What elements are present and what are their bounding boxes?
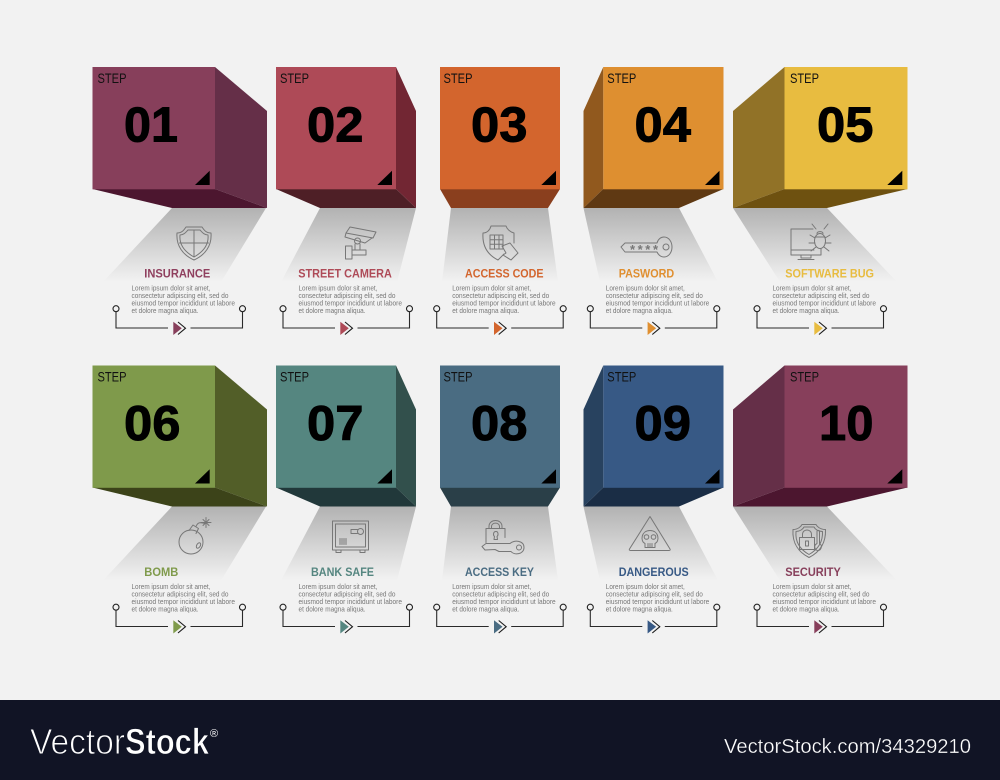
footer bar: ® <box>210 728 218 740</box>
panel: step 02 street camera <box>276 67 416 335</box>
heading: SOFTWARE BUG <box>785 267 874 281</box>
text block: et dolore magna aliqua. <box>606 604 673 614</box>
cube: STEP <box>280 370 309 384</box>
icon: safe <box>332 521 368 552</box>
shadow <box>733 208 897 282</box>
text block: eiusmod tempor incididunt ut labore <box>452 597 556 606</box>
connector arrow <box>280 306 412 335</box>
cube: 03 <box>471 98 528 153</box>
cube: 04 <box>634 98 691 153</box>
text block: Lorem ipsum dolor sit amet, <box>132 582 210 591</box>
heading: STREET CAMERA <box>298 267 392 281</box>
shadow <box>103 208 266 282</box>
text block: Lorem ipsum dolor sit amet, <box>298 582 378 591</box>
connector arrow <box>754 306 886 335</box>
text block: consectetur adipiscing elit, sed do <box>132 291 228 300</box>
text block: et dolore magna aliqua. <box>772 306 840 315</box>
cube: STEP <box>98 370 126 384</box>
connector arrow <box>434 604 566 634</box>
cube: STEP <box>444 370 472 384</box>
connector arrow <box>280 604 412 634</box>
cube: 10 <box>819 396 874 451</box>
text block: Lorem ipsum dolor sit amet, <box>132 284 210 292</box>
text block: eiusmod tempor incididunt ut labore <box>132 597 235 606</box>
icon: skull warning triangle <box>629 516 670 550</box>
cube: 06 <box>124 396 180 451</box>
text block: eiusmod tempor incididunt ut labore <box>452 298 556 308</box>
cube: STEP <box>280 71 309 86</box>
text block: eiusmod tempor incididunt ut labore <box>132 298 235 308</box>
heading: ACCESS KEY <box>465 565 534 579</box>
cube <box>440 366 560 506</box>
icon: monitor with bug <box>791 224 831 260</box>
cube <box>440 67 560 208</box>
cube <box>92 366 267 506</box>
cube <box>584 366 724 506</box>
text block <box>452 582 556 614</box>
heading: BOMB <box>144 565 179 579</box>
heading: INSURANCE <box>144 267 210 281</box>
icon: lock and key <box>482 520 524 554</box>
cube: 08 <box>471 396 528 451</box>
icon: shield keypad <box>483 226 518 260</box>
text block: et dolore magna aliqua. <box>132 306 198 315</box>
text block <box>132 582 235 614</box>
panel: step 08 access key <box>434 366 566 634</box>
shadow <box>442 208 558 282</box>
text block: consectetur adipiscing elit, sed do <box>132 590 228 598</box>
text block: eiusmod tempor incididunt ut labore <box>298 298 402 308</box>
text block: et dolore magna aliqua. <box>452 604 519 614</box>
text block <box>772 582 876 614</box>
text block <box>772 284 876 315</box>
text block: Lorem ipsum dolor sit amet, <box>772 582 852 591</box>
text block: consectetur adipiscing elit, sed do <box>606 590 703 598</box>
shadow <box>733 506 897 580</box>
connector arrow <box>587 604 720 634</box>
text block <box>452 284 556 315</box>
cube: STEP <box>607 71 636 86</box>
text block: Lorem ipsum dolor sit amet, <box>298 284 378 292</box>
cube: STEP <box>790 370 819 384</box>
text block: et dolore magna aliqua. <box>606 306 673 315</box>
panel: step 06 bomb <box>92 366 267 634</box>
panel: step 01 insurance <box>92 67 267 335</box>
text block: eiusmod tempor incididunt ut labore <box>772 298 876 308</box>
text block: et dolore magna aliqua. <box>298 306 366 315</box>
footer bar <box>0 700 1000 780</box>
text block: eiusmod tempor incididunt ut labore <box>772 597 876 606</box>
cube <box>276 366 416 506</box>
panel: step 10 security <box>733 366 908 634</box>
footer bar: Vector <box>30 721 125 762</box>
text block <box>298 284 402 315</box>
connector arrow <box>434 306 566 335</box>
text block: consectetur adipiscing elit, sed do <box>772 291 870 300</box>
panel: step 09 dangerous <box>584 366 724 634</box>
heading: PASWORD <box>619 267 674 281</box>
cube <box>276 67 416 208</box>
text block: Lorem ipsum dolor sit amet, <box>606 582 685 591</box>
panel: step 07 bank safe <box>276 366 416 634</box>
text block: Lorem ipsum dolor sit amet, <box>452 582 531 591</box>
cube: STEP <box>98 71 126 86</box>
icon: password key: **** <box>630 242 659 257</box>
shadow <box>103 506 266 580</box>
text block: consectetur adipiscing elit, sed do <box>452 590 549 598</box>
cube: 02 <box>307 98 364 153</box>
cube: STEP <box>607 370 636 384</box>
footer bar: VectorStock.com/34329210 <box>724 736 971 758</box>
text block: et dolore magna aliqua. <box>298 604 366 614</box>
text block: consectetur adipiscing elit, sed do <box>298 590 396 598</box>
shadow <box>281 208 416 282</box>
cube <box>92 67 267 208</box>
shadow <box>442 506 558 580</box>
heading: SECURITY <box>785 565 841 579</box>
connector arrow <box>587 306 720 335</box>
cube: 07 <box>307 396 364 451</box>
panel: step 04 password <box>584 67 724 335</box>
cube: 05 <box>817 98 874 153</box>
connector arrow <box>113 604 246 634</box>
connector arrow <box>113 306 246 335</box>
text block <box>606 582 709 614</box>
shadow <box>584 506 718 580</box>
text block: eiusmod tempor incididunt ut labore <box>298 597 402 606</box>
shadow <box>584 208 718 282</box>
connector arrow <box>754 604 886 634</box>
text block: et dolore magna aliqua. <box>132 604 198 614</box>
text block: et dolore magna aliqua. <box>452 306 519 315</box>
text block: Lorem ipsum dolor sit amet, <box>772 284 852 292</box>
text block: eiusmod tempor incididunt ut labore <box>606 597 709 606</box>
icon: security camera <box>345 227 376 259</box>
text block: consectetur adipiscing elit, sed do <box>452 291 549 300</box>
text block <box>298 582 402 614</box>
cube: 09 <box>634 396 691 451</box>
icon: bomb <box>179 518 211 554</box>
text block: eiusmod tempor incididunt ut labore <box>606 298 709 308</box>
icon: password key <box>621 237 672 257</box>
text block: et dolore magna aliqua. <box>772 604 840 614</box>
cube: STEP <box>790 71 819 86</box>
text block: consectetur adipiscing elit, sed do <box>772 590 870 598</box>
heading: ACCESS CODE <box>465 267 544 281</box>
heading: DANGEROUS <box>619 565 689 579</box>
cube: STEP <box>444 71 472 86</box>
text block <box>132 284 235 315</box>
cube <box>733 366 908 506</box>
heading: BANK SAFE <box>311 565 374 579</box>
cube <box>584 67 724 208</box>
text block: Lorem ipsum dolor sit amet, <box>606 284 685 292</box>
text block: consectetur adipiscing elit, sed do <box>298 291 396 300</box>
shadow <box>281 506 416 580</box>
panel: step 05 software bug <box>733 67 908 335</box>
icon: shield <box>177 227 211 260</box>
footer bar: Stock <box>125 721 210 762</box>
text block: Lorem ipsum dolor sit amet, <box>452 284 531 292</box>
text block <box>606 284 709 315</box>
text block: consectetur adipiscing elit, sed do <box>606 291 703 300</box>
cube: 01 <box>124 98 178 153</box>
panel: step 03 access code <box>434 67 566 335</box>
cube <box>733 67 908 208</box>
icon: security shield <box>793 524 826 558</box>
